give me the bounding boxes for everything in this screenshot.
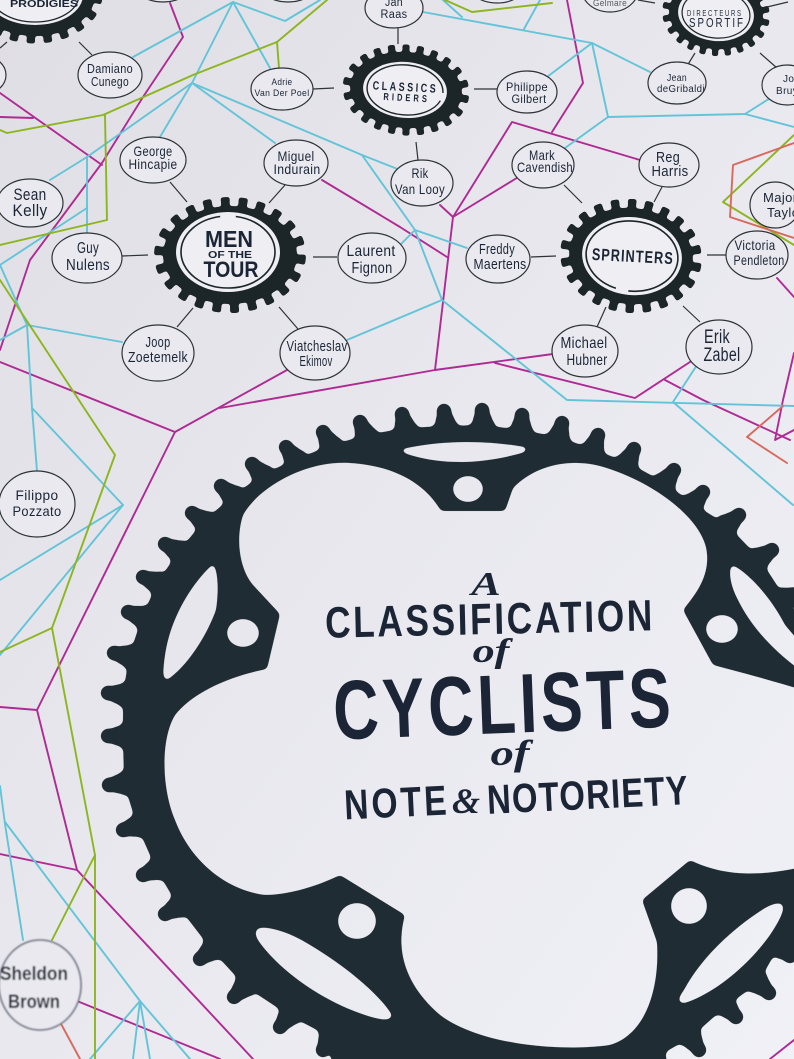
node: Joop Zoetemelk	[122, 325, 194, 381]
node: Sheldon Brown: Brown	[8, 992, 60, 1013]
node: Michael Hubner: Michael	[560, 335, 608, 352]
node: Joop Zoetemelk: Zoetemelk	[128, 349, 188, 366]
node: Philippe Gilbert	[497, 71, 557, 113]
gear label: OF THE	[208, 249, 252, 261]
node: Freddy Maertens: Freddy	[479, 241, 515, 258]
node: Sean Kelly	[0, 179, 63, 227]
node: George Hincapie	[120, 137, 186, 183]
title: CYCLISTS: CYCLISTS	[331, 651, 672, 758]
chainring teeth	[108, 410, 794, 1059]
title: ampersand: &	[452, 781, 480, 821]
node: Mark Cavendish	[512, 142, 574, 188]
node: Jean deGribaldi: deGribaldi	[657, 84, 705, 95]
node: Miguel Indurain	[264, 140, 328, 186]
gear label: SPRINTERS	[591, 245, 673, 269]
node: Rik Van Looy: Rik	[412, 165, 429, 181]
node: Filippo Pozzato: Filippo	[16, 487, 58, 503]
node: Victoria Pendleton	[726, 231, 788, 279]
gear: directeurs sportif	[663, 0, 769, 56]
node: Adrie Van Der Poel: Adrie	[272, 77, 292, 88]
node: Michael Hubner	[552, 325, 618, 377]
node: Guy Nulens: Nulens	[66, 257, 110, 274]
node: Erik Zabel: Zabel	[704, 345, 740, 366]
title: NOTE: NOTE	[343, 778, 448, 829]
node: Major Taylor	[750, 182, 794, 228]
gear: sprinters	[561, 198, 701, 314]
node: Freddy Maertens	[466, 235, 530, 283]
node: Erik Zabel	[686, 320, 752, 374]
partial node at top right of centre	[467, 0, 527, 3]
node: Sean Kelly: Kelly	[12, 201, 48, 220]
gear: men of the tour	[160, 203, 300, 307]
gear label: TOUR	[204, 257, 259, 282]
node: Philippe Gilbert: Philippe	[506, 80, 548, 94]
node: Reg Harris: Harris	[652, 163, 688, 180]
node: Filippo Pozzato	[0, 471, 75, 537]
node: Rik Van Looy	[391, 160, 453, 206]
node: Jean deGribaldi	[648, 62, 706, 104]
title: of: of	[473, 632, 514, 670]
node: Damiano Cunego: Cunego	[91, 75, 129, 89]
node: Filippo Pozzato: Pozzato	[12, 503, 62, 519]
node: Sean Kelly: Sean	[14, 185, 46, 204]
node: Jan Raas: Raas	[380, 9, 408, 21]
node: Damiano Cunego	[78, 52, 142, 98]
title	[325, 565, 689, 829]
node: Guy Nulens	[52, 233, 122, 283]
partial node at top	[133, 0, 193, 2]
node: Viatcheslav Ekimov: Viatcheslav	[286, 338, 348, 355]
title: of: of	[491, 734, 534, 774]
node: Guy Nulens: Guy	[77, 240, 99, 257]
node: Viatcheslav Ekimov: Ekimov	[300, 353, 333, 370]
node: Johan Bruyneel	[762, 65, 794, 105]
node: Victoria Pendleton: Victoria	[734, 237, 776, 253]
node: Jan Raas	[365, 0, 423, 28]
chainring body with spider arms and cut-outs	[126, 428, 794, 1059]
node: George Hincapie: Hincapie	[128, 156, 178, 172]
node: Miguel Indurain: Miguel	[278, 148, 314, 164]
node: Freddy Maertens: Maertens	[474, 256, 526, 273]
node: Adrie Van Der Poel: Van Der Poel	[254, 88, 310, 99]
node: Reg Harris: Reg	[656, 149, 680, 166]
node: Laurent Fignon: Fignon	[352, 260, 392, 277]
gear: prodigies	[0, 0, 97, 38]
node: George Hincapie: George	[134, 143, 172, 159]
gear label: DIRECTEURS	[687, 10, 741, 18]
connectors between nodes and gears	[0, 0, 788, 329]
node: Mark Cavendish: Mark	[529, 147, 555, 163]
gear label	[372, 79, 436, 104]
node: Mark Cavendish: Cavendish	[517, 159, 573, 175]
large chainring	[108, 410, 794, 1059]
node: Reg Harris	[639, 143, 699, 187]
node: Laurent Fignon: Laurent	[346, 243, 396, 260]
title: A: A	[468, 565, 501, 603]
node: Viatcheslav Ekimov	[280, 326, 350, 380]
gear label: SPORTIF	[689, 17, 743, 30]
title: NOTORIETY: NOTORIETY	[486, 767, 689, 823]
node: Sheldon Brown: Sheldon	[0, 964, 68, 985]
node: Rik Van Looy: Van Looy	[395, 181, 445, 197]
node: Philippe Gilbert: Gilbert	[512, 92, 547, 106]
gear label	[204, 226, 259, 282]
node: Jean deGribaldi: Jean	[667, 73, 687, 84]
network: orange lineage lines	[60, 143, 794, 1059]
title: CLASSIFICATION: CLASSIFICATION	[325, 592, 653, 648]
node: Damiano Cunego: Damiano	[87, 62, 133, 76]
partial node at left edge	[0, 54, 6, 96]
node: Sheldon Brown	[0, 940, 81, 1030]
node: Joop Zoetemelk: Joop	[146, 334, 170, 351]
node: Adrie Van Der Poel	[251, 68, 313, 110]
node: Miguel Indurain: Indurain	[274, 161, 320, 177]
gear label: MEN	[205, 226, 253, 252]
node: Laurent Fignon	[338, 233, 406, 283]
gear label	[687, 10, 743, 30]
gear label: CLASSICS	[372, 79, 436, 96]
gear label: RIDERS	[383, 91, 427, 104]
partial node near directeurs	[582, 0, 638, 12]
gear: classics riders	[345, 45, 467, 135]
partial node at top centre	[258, 0, 318, 2]
node: Erik Zabel: Erik	[704, 327, 730, 348]
node: Michael Hubner: Hubner	[566, 352, 608, 369]
